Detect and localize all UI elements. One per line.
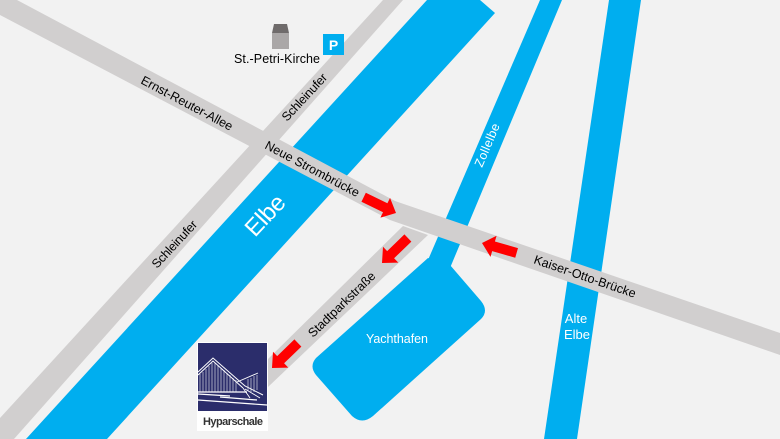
label: Alte Elbe: Elbe bbox=[564, 327, 590, 342]
label: Alte Elbe bbox=[564, 311, 590, 342]
arrow: towards junction from Neue Strombrücke bbox=[359, 187, 401, 223]
arrow: down Stadtparkstraße upper bbox=[374, 230, 416, 271]
label: Zollelbe: Zollelbe bbox=[472, 121, 503, 169]
label: Schleinufer lower: Schleinufer bbox=[149, 218, 200, 271]
icon: St.-Petri-Kirche bbox=[272, 24, 289, 49]
icon: parking: P bbox=[329, 37, 338, 53]
label: Ernst-Reuter-Allee: Ernst-Reuter-Allee bbox=[139, 73, 235, 134]
logo: Hyparschale bbox=[197, 342, 268, 431]
river: Zollelbe bbox=[428, 0, 562, 268]
road: Schleinufer bbox=[0, 0, 403, 439]
label: Neue Strombrücke: Neue Strombrücke bbox=[263, 138, 362, 200]
road: Stadtparkstraße bbox=[268, 226, 428, 387]
label: St.-Petri-Kirche: St.-Petri-Kirche bbox=[234, 52, 320, 66]
label: Yachthafen: Yachthafen bbox=[366, 332, 428, 346]
basin: Yachthafen bbox=[312, 258, 485, 420]
label: Alte Elbe: Alte bbox=[565, 311, 587, 326]
arrow: down Stadtparkstraße lower bbox=[264, 335, 306, 376]
label: Elbe: Elbe bbox=[240, 189, 291, 242]
arrow: towards junction from Kaiser-Otto-Brücke bbox=[479, 232, 520, 263]
river: Alte Elbe bbox=[544, 0, 641, 439]
icon: parking bbox=[323, 34, 344, 55]
label: Schleinufer upper: Schleinufer bbox=[279, 71, 330, 124]
logo label: Hyparschale bbox=[203, 416, 263, 428]
river: Elbe bbox=[26, 0, 495, 439]
label: Kaiser-Otto-Brücke: Kaiser-Otto-Brücke bbox=[532, 253, 638, 301]
label: Stadtparkstraße: Stadtparkstraße bbox=[305, 269, 378, 340]
